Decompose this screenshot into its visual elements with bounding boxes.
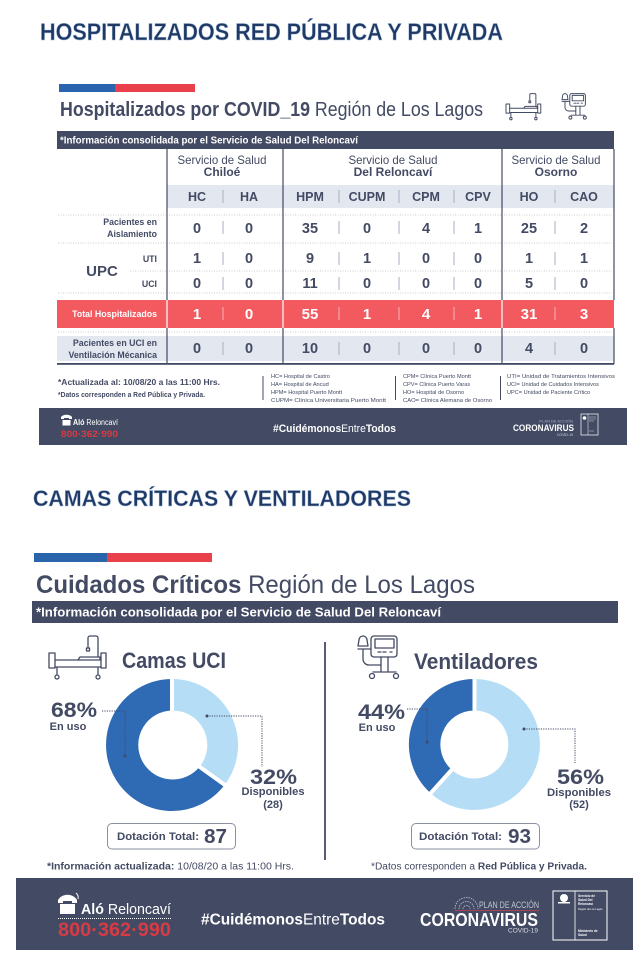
legend: units: UPC= Unidad de Paciente Crítico (507, 390, 590, 396)
row: total hospitalizados: 1 (363, 306, 371, 323)
row: uci: 0 (363, 276, 371, 292)
info bar: *Información consolidada por el Servicio de Salud Del Reloncaví (60, 136, 359, 146)
covid-19: COVID-19 (508, 928, 538, 934)
callout: 56% disponibles: (52) (569, 799, 589, 811)
plan de acción: PLAN DE ACCIÓN (479, 900, 539, 911)
legend: hospitals 1: HPM= Hospital Puerto Montt (271, 390, 342, 396)
icon: ventilator (358, 636, 398, 678)
column codes: HO (520, 190, 539, 204)
row: uti: 0 (422, 251, 430, 267)
legend: units: UCI= Unidad de Cuidados Intensivos (507, 382, 599, 388)
section: ventiladores (358, 636, 611, 872)
service header: osorno: Osorno (535, 165, 577, 179)
logo: ministerio de salud: Salud Del (578, 898, 593, 902)
note: datos: *Datos corresponden a Red Pública y Privada. (58, 392, 205, 399)
column codes: HA (240, 190, 258, 204)
row: uci: 5 (525, 276, 533, 292)
row: total hospitalizados: 1 (474, 306, 482, 323)
row: pacientes en aislamiento: 4 (422, 221, 430, 237)
callout: 32% disponibles (206, 714, 304, 811)
row: pacientes en aislamiento: 1 (474, 221, 482, 237)
alo reloncaví: Aló Reloncaví (81, 901, 172, 918)
row: uci: 0 (245, 276, 253, 292)
row: uti (143, 251, 588, 267)
legend: hospitals 2: CAO= Clínica Alemana de Osorno (403, 398, 492, 404)
phone number small: 800·362·990 (61, 429, 118, 440)
row: uci (142, 276, 588, 292)
row: pacientes en aislamiento (103, 217, 588, 239)
service header: osorno: Servicio de Salud (512, 153, 600, 167)
box: dotación total 87 (108, 824, 236, 849)
legend: units: UTI= Unidad de Tratamientos Intensivos (507, 374, 615, 380)
callout: 44% en uso (358, 701, 428, 744)
note: datos corresponden: *Datos corresponden a Red Pública y Privada. (371, 862, 587, 872)
column codes: CPM (412, 190, 440, 204)
flag stripe (34, 553, 212, 562)
icon: phone small (61, 415, 72, 426)
note: actualizada: *Actualizada al: 10/08/20 a las 11:00 Hrs. (58, 377, 220, 387)
service header: del reloncaví: Servicio de Salud (348, 153, 438, 167)
row: uti: 1 (525, 251, 533, 267)
legend: hospitals 1: HC= Hospital de Castro (271, 374, 330, 380)
callout: 32% disponibles: Disponibles (242, 786, 304, 798)
box: dotación total 87: Dotación Total: (117, 831, 199, 843)
row: total hospitalizados: 3 (580, 306, 588, 323)
title: hospitalizados: HOSPITALIZADOS RED PÚBLICA Y PRIVADA (40, 18, 503, 46)
row: uci: 11 (302, 276, 318, 292)
donut chart: ventiladores (407, 677, 542, 812)
row: uci: 0 (422, 276, 430, 292)
legend: hospitals 2 (396, 374, 492, 404)
column codes: CUPM (349, 190, 385, 204)
row: ventilación mecánica: 0 (363, 341, 371, 357)
coronavirus: CORONAVIRUS (420, 910, 538, 930)
footer banner: bottom (16, 878, 633, 950)
row: uci: 0 (193, 276, 201, 292)
row: total hospitalizados: 1 (193, 306, 201, 323)
logo: ministerio de salud (553, 891, 607, 940)
service header: del reloncaví: Del Reloncaví (354, 165, 433, 179)
legend: hospitals 1: HA= Hospital de Ancud (271, 382, 329, 388)
row: ventilación mecánica: 0 (245, 341, 253, 357)
section: camas uci (47, 636, 304, 872)
info bar (32, 601, 618, 623)
callout: 32% disponibles: 32% (250, 766, 297, 789)
callout: 56% disponibles: Disponibles (547, 787, 611, 799)
row: pacientes en aislamiento: 35 (302, 221, 318, 237)
callout: 68% en uso (50, 699, 126, 758)
icon: ventilator (562, 94, 586, 119)
service header: del reloncaví (348, 153, 438, 179)
callout: 44% en uso: 44% (358, 701, 405, 724)
row: total hospitalizados (72, 306, 588, 323)
service header: osorno (512, 153, 600, 179)
service header: chiloé: Chiloé (204, 165, 241, 179)
covid-19 small: COVID-19 (557, 433, 573, 437)
row: total hospitalizados: 55 (302, 306, 318, 323)
legend: hospitals 2: CPM= Clínica Puerto Montt (403, 374, 471, 380)
coronavirus small: CORONAVIRUS (513, 423, 574, 433)
legend: units (500, 374, 615, 400)
row: uci: 0 (580, 276, 588, 292)
donut chart: camas uci (104, 677, 240, 813)
row: total hospitalizados: 4 (422, 306, 431, 323)
row: uti: UTI (143, 254, 157, 264)
row: uti: 1 (363, 251, 371, 267)
row: pacientes en aislamiento: 0 (363, 221, 371, 237)
row: ventilación mecánica: 0 (580, 341, 588, 357)
row: pacientes en aislamiento: 0 (193, 221, 201, 237)
service header: chiloé: Servicio de Salud (178, 153, 266, 167)
icon: hospital bed (49, 636, 106, 679)
row band: total hospitalizados (57, 300, 614, 328)
row: uti: 0 (245, 251, 253, 267)
alo reloncaví small: Aló Reloncaví (73, 418, 119, 427)
row: pacientes en aislamiento: Pacientes en (103, 217, 157, 227)
row: pacientes en aislamiento: 2 (580, 221, 588, 237)
logo: ministerio de salud: Servicio de (578, 894, 595, 898)
heading: hospitalizados por covid: Hospitalizados por COVID_19 Región de Los Lagos (60, 99, 483, 121)
row: ventilación mecánica: 0 (193, 341, 201, 357)
row: ventilación mecánica: 10 (302, 341, 318, 357)
row: ventilación mecánica: Pacientes en UCI en (73, 338, 157, 348)
logo: ministerio de salud: Salud (578, 933, 587, 937)
flag stripe (59, 84, 195, 92)
logo: ministerio de salud: Reloncaví (578, 902, 593, 906)
row: ventilación mecánica: 0 (474, 341, 482, 357)
info bar: *Información consolidada por el Servicio de Salud Del Reloncaví (36, 604, 441, 620)
box: dotación total 87: 87 (204, 826, 227, 848)
row: total hospitalizados: 31 (521, 306, 537, 323)
legend: hospitals 2: CPV= Clínica Puerto Varas (403, 382, 470, 388)
column codes: HPM (296, 190, 324, 204)
panel: cuidados críticos (16, 553, 633, 950)
column codes: CPV (465, 190, 492, 204)
row: uci: 0 (474, 276, 482, 292)
row: ventilación mecánica: 0 (422, 341, 430, 357)
box: dotación total 93: 93 (508, 826, 531, 848)
row label: upc: UPC (86, 263, 118, 280)
service header: chiloé (178, 153, 266, 179)
row: uti: 9 (306, 251, 314, 267)
row: ventilación mecánica: Ventilación Mécanica (68, 350, 157, 360)
callout: 32% disponibles: (28) (263, 799, 283, 811)
box: dotación total 93: Dotación Total: (419, 831, 502, 843)
callout: 68% en uso: 68% (51, 699, 97, 722)
hashtag small: #CuidémonosEntreTodos (273, 423, 396, 435)
row: pacientes en aislamiento: 25 (521, 221, 537, 237)
column codes: CAO (570, 190, 598, 204)
column codes: HC (188, 190, 206, 204)
logo small (581, 414, 598, 435)
row: ventilación mecánica (68, 338, 588, 360)
column codes (188, 190, 598, 204)
legend: hospitals 1 (263, 374, 386, 404)
hashtag: #CuidémonosEntreTodos (201, 912, 385, 928)
callout: 44% en uso: En uso (359, 722, 396, 734)
box: dotación total 93 (412, 824, 540, 849)
row: ventilación mecánica: 4 (525, 341, 533, 357)
heading: camas uci: Camas UCI (122, 648, 226, 673)
row: uti: 1 (580, 251, 588, 267)
footer banner: top (39, 408, 627, 445)
note: información actualizada: *Información actualizada: 10/08/20 a las 11:00 Hrs. (47, 862, 294, 872)
legend: hospitals 2: HO= Hospital de Osorno (403, 390, 464, 396)
logo: ministerio de salud: Región de Los Lagos (578, 907, 603, 911)
plan de acción small: PLAN DE ACCIÓN (539, 418, 573, 424)
info bar (57, 131, 614, 149)
heading: cuidados críticos: Cuidados Críticos Región de Los Lagos (36, 571, 475, 599)
row: total hospitalizados: 0 (245, 306, 253, 323)
heading: ventiladores: Ventiladores (414, 649, 538, 674)
row: uti: 0 (474, 251, 482, 267)
row: pacientes en aislamiento: 0 (245, 221, 253, 237)
icon: phone (58, 893, 78, 914)
sub-header band (167, 185, 614, 208)
icon: virus globe (455, 898, 478, 909)
row: uci: UCI (142, 279, 157, 289)
row: total hospitalizados: Total Hospitalizados (72, 309, 157, 319)
icon: hospital bed (506, 94, 541, 120)
callout: 56% disponibles (522, 728, 611, 811)
row: pacientes en aislamiento: Aislamiento (107, 229, 158, 239)
panel: hospitalizados table card (39, 84, 627, 445)
row: uti: 1 (193, 251, 201, 267)
callout: 68% en uso: En uso (50, 721, 87, 733)
callout: 56% disponibles: 56% (557, 766, 604, 789)
legend: hospitals 1: CUPM= Clínica Universitaria Puerto Montt (271, 398, 386, 404)
row band: ventilación mecánica (57, 336, 614, 361)
phone number: 800·362·990 (58, 920, 171, 941)
logo: ministerio de salud: Ministerio de (578, 929, 598, 933)
title: camas críticas: CAMAS CRÍTICAS Y VENTILADORES (33, 486, 411, 511)
